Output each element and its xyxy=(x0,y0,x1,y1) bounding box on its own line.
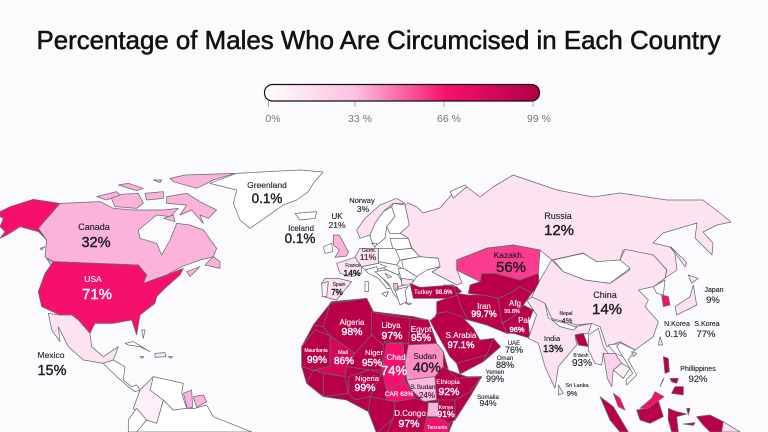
North Korea xyxy=(664,321,690,340)
Spain: 7% xyxy=(331,288,343,297)
Thailand xyxy=(603,353,622,387)
Chad: 74% xyxy=(381,363,407,378)
Somalia: Somalia xyxy=(477,395,499,401)
Africa: South Sudan xyxy=(407,377,437,402)
Africa: Egypt xyxy=(408,318,437,345)
Egypt: 95% xyxy=(411,333,431,344)
Malaysia xyxy=(613,393,625,410)
Sumatra xyxy=(600,397,628,432)
CAR: CAR 63% xyxy=(385,391,413,398)
Kazakhstan xyxy=(457,245,540,282)
Ethiopia xyxy=(436,379,460,398)
Pakistan: Pak xyxy=(518,316,533,325)
Saudi Arabia: 97.1% xyxy=(448,340,475,351)
Africa: Uganda xyxy=(427,403,438,417)
Philippines xyxy=(660,357,683,395)
Germany: Germ. xyxy=(362,248,376,254)
Alaska xyxy=(0,199,60,243)
Africa: Tanzania xyxy=(423,417,450,432)
Germany xyxy=(355,248,378,267)
legend labels: 33 % xyxy=(348,113,372,125)
North Korea xyxy=(653,280,665,295)
Kazakhstan: 56% xyxy=(496,259,526,276)
Portugal xyxy=(322,282,328,297)
map: Americas and Greenland xyxy=(0,170,323,432)
map labels: white xyxy=(82,274,533,431)
Sudan: 40% xyxy=(413,359,441,375)
legend labels: 0% xyxy=(265,113,281,125)
Africa: Ethiopia xyxy=(435,367,482,400)
Ethiopia: Ethiopia xyxy=(436,379,460,386)
Mexico xyxy=(37,350,67,379)
Libya: 97% xyxy=(381,330,403,342)
Mexico xyxy=(48,313,118,363)
UK: UK xyxy=(331,212,343,221)
South Korea: 77% xyxy=(696,329,716,340)
Norway xyxy=(349,196,375,214)
Philippines: Phillippines xyxy=(680,366,716,373)
UK: 21% xyxy=(328,220,346,230)
Bangladesh xyxy=(572,353,592,369)
Japan: 9% xyxy=(706,295,720,306)
Algeria: 98% xyxy=(341,326,363,338)
Canadian islands xyxy=(40,173,235,277)
South Sudan: 24% xyxy=(419,391,435,400)
Syria and Iraq xyxy=(437,295,468,320)
Yemen xyxy=(457,355,487,374)
UK xyxy=(328,212,346,230)
France xyxy=(337,257,362,277)
Yemen: 99% xyxy=(486,374,504,384)
Kenya: 91% xyxy=(437,409,455,419)
Eastern Europe xyxy=(372,238,440,282)
UAE: UAE xyxy=(508,341,520,347)
Russia: 12% xyxy=(544,222,574,239)
Niger: Niger xyxy=(365,348,383,357)
India: 13% xyxy=(543,344,563,355)
Chad xyxy=(381,353,407,378)
Algeria xyxy=(340,318,365,338)
Norway: Norway xyxy=(349,196,375,205)
Niger: 95% xyxy=(362,358,382,369)
Oman xyxy=(483,338,501,362)
Nepal: Nepal xyxy=(559,311,573,317)
Mongolia xyxy=(553,253,630,283)
Nigeria xyxy=(354,374,380,394)
Caribbean xyxy=(125,330,173,358)
Greenland: Greenland xyxy=(247,180,287,190)
Central Europe and Italy xyxy=(362,263,412,305)
Greenland xyxy=(210,170,323,228)
legend bar xyxy=(264,84,540,101)
Mali: 86% xyxy=(334,356,354,367)
France xyxy=(343,263,361,278)
D.Congo: D.Congo xyxy=(394,409,426,418)
Greenland: 0.1% xyxy=(252,191,282,206)
Iran xyxy=(457,293,507,333)
Iceland: Iceland xyxy=(288,224,314,233)
map labels: dark xyxy=(37,180,724,408)
Libya: Libya xyxy=(381,321,401,330)
South Korea xyxy=(694,321,720,340)
Africa: Nigeria xyxy=(348,370,382,400)
Mali: Mali xyxy=(338,350,348,356)
Canada xyxy=(38,202,217,283)
Mexico: Mexico xyxy=(38,350,65,360)
North Korea: N.Korea xyxy=(664,321,690,328)
Ethiopia: 92% xyxy=(438,386,460,398)
Pakistan xyxy=(503,305,533,338)
Taiwan xyxy=(658,337,663,345)
Africa: Sudan xyxy=(405,343,443,380)
Japan xyxy=(671,247,698,315)
Nepal: 4% xyxy=(562,316,573,325)
South Korea xyxy=(662,295,670,307)
Russia: Russia xyxy=(544,211,572,221)
Kenya: Kenya xyxy=(439,405,453,411)
Balkan accents xyxy=(385,273,413,290)
Egypt xyxy=(411,325,432,344)
India: India xyxy=(544,334,561,343)
South America xyxy=(128,377,252,432)
map: Europe, Middle East and Africa xyxy=(295,185,540,432)
Germany: 11% xyxy=(360,252,377,262)
Somalia: 94% xyxy=(479,398,497,408)
Central America xyxy=(103,360,140,392)
Turkey: Turkey xyxy=(414,290,432,296)
Afghanistan: Afg xyxy=(509,299,521,308)
Africa: Niger xyxy=(347,335,383,370)
Spain xyxy=(331,282,346,297)
Japan: Japan xyxy=(704,287,724,294)
Iran: Iran xyxy=(477,302,491,311)
China xyxy=(592,290,622,318)
Kazakhstan: Kazakh. xyxy=(494,250,524,260)
South Sudan xyxy=(411,384,436,400)
Afghanistan xyxy=(498,287,532,323)
legend labels: 66 % xyxy=(437,113,461,125)
UAE: 76% xyxy=(505,345,523,355)
France: 14% xyxy=(343,268,361,278)
Somalia xyxy=(477,395,499,408)
Iran: 99.7% xyxy=(471,309,497,319)
Spain: Spain xyxy=(333,282,346,288)
Nepal xyxy=(552,320,577,330)
Tanzania: Tanzania xyxy=(427,425,447,431)
legend labels xyxy=(265,113,551,125)
Afghanistan: 99.8% xyxy=(504,309,520,315)
world map xyxy=(0,170,740,432)
Canada: Canada xyxy=(78,222,110,232)
USA: 71% xyxy=(82,286,112,303)
legend ticks xyxy=(268,101,533,107)
China xyxy=(532,249,667,350)
Saudi Arabia: S.Arabia xyxy=(446,331,477,340)
Kenya xyxy=(437,405,455,419)
Sudan: Sudan xyxy=(413,352,437,361)
legend: colour scale xyxy=(264,84,551,125)
South Sudan: S.Sudan xyxy=(411,384,436,391)
Turkey xyxy=(414,290,453,296)
Chad: Chad xyxy=(386,353,406,362)
Iceland xyxy=(285,224,315,246)
Pakistan xyxy=(509,316,533,334)
D.Congo: 97% xyxy=(398,418,420,430)
Africa: D.Congo xyxy=(387,398,428,432)
Saudi Arabia xyxy=(430,312,493,363)
Canada xyxy=(78,222,111,251)
USA xyxy=(38,262,183,335)
Iran xyxy=(471,302,497,319)
Yemen: Yemen xyxy=(486,370,504,376)
Borneo xyxy=(637,392,664,423)
Afghanistan xyxy=(504,299,521,315)
Africa: Chad xyxy=(382,343,405,390)
Oman: Oman xyxy=(497,356,513,362)
Ireland xyxy=(323,243,333,253)
Africa: Kenya xyxy=(438,400,455,423)
Laos xyxy=(608,343,630,357)
Africa: Algeria xyxy=(323,298,373,353)
India xyxy=(543,334,563,355)
Africa: Mali xyxy=(313,336,355,377)
Sudan xyxy=(413,352,441,375)
Turkey: 98.6% xyxy=(435,290,453,296)
USA: USA xyxy=(84,274,102,284)
North Korea: 0.1% xyxy=(665,329,687,340)
Africa base xyxy=(302,298,482,432)
Mauritania xyxy=(304,348,328,366)
Mauritania: 99% xyxy=(307,355,327,366)
Nigeria: 99% xyxy=(354,382,376,394)
D.Congo xyxy=(394,409,426,430)
Myanmar xyxy=(588,328,608,365)
Iceland: 0.1% xyxy=(285,231,315,246)
USA xyxy=(82,274,112,303)
Saudi Arabia xyxy=(446,331,477,351)
Yemen xyxy=(486,370,504,384)
Vietnam and Cambodia xyxy=(613,343,637,385)
Nepal xyxy=(559,311,573,325)
China: 14% xyxy=(592,301,622,318)
Africa: Morocco and Mauritania xyxy=(302,302,332,370)
map: Russia xyxy=(400,175,731,285)
Greenland xyxy=(247,180,287,206)
Egypt: Egypt xyxy=(411,325,432,334)
Niger xyxy=(362,348,383,369)
Algeria: Algeria xyxy=(340,318,365,327)
Germany xyxy=(360,248,377,262)
Nordic countries xyxy=(357,198,409,245)
Japan xyxy=(704,287,724,306)
Sri Lanka: 9% xyxy=(567,389,578,398)
map: Asia xyxy=(527,247,740,432)
Kazakhstan xyxy=(494,250,526,276)
UK xyxy=(333,235,348,257)
India xyxy=(527,297,592,388)
Mali xyxy=(334,350,354,367)
Libya xyxy=(381,321,403,342)
Africa: West coast xyxy=(307,370,395,432)
Indonesia east xyxy=(668,408,723,432)
Papua New Guinea xyxy=(722,422,740,432)
title: Percentage of Males Who Are Circumcised in Each Country xyxy=(36,25,720,55)
Canada: 32% xyxy=(81,235,111,251)
Oman: 88% xyxy=(496,360,514,370)
Cyprus and islands xyxy=(405,303,412,305)
South Korea: S.Korea xyxy=(694,321,720,328)
Central Asia xyxy=(468,273,539,298)
Philippines xyxy=(680,366,716,385)
Mauritania: Mauritania xyxy=(304,348,328,354)
Turkey xyxy=(410,283,458,298)
Sri Lanka xyxy=(565,383,590,398)
Norway: 3% xyxy=(357,204,370,214)
Bangladesh: B'desh xyxy=(573,353,589,359)
Africa: CAR xyxy=(387,382,415,402)
Spain xyxy=(322,278,352,300)
legend labels: 99 % xyxy=(527,113,551,125)
China: China xyxy=(593,290,617,300)
Iceland xyxy=(295,212,317,220)
Novaya Zemlya xyxy=(450,185,467,198)
France: France xyxy=(345,263,361,269)
Nigeria: Nigeria xyxy=(355,374,380,383)
Sri Lanka: Sri Lanka xyxy=(565,383,590,389)
Pakistan: 96% xyxy=(509,325,525,334)
Sri Lanka xyxy=(558,385,563,395)
Philippines: 92% xyxy=(688,374,708,385)
Russia xyxy=(544,211,574,239)
Africa: Libya xyxy=(372,312,410,345)
Africa: Somalia xyxy=(455,377,482,420)
Bangladesh xyxy=(575,333,588,347)
Bangladesh: 93% xyxy=(572,358,592,369)
Caucasus xyxy=(443,285,462,294)
Mexico: 15% xyxy=(37,363,67,379)
